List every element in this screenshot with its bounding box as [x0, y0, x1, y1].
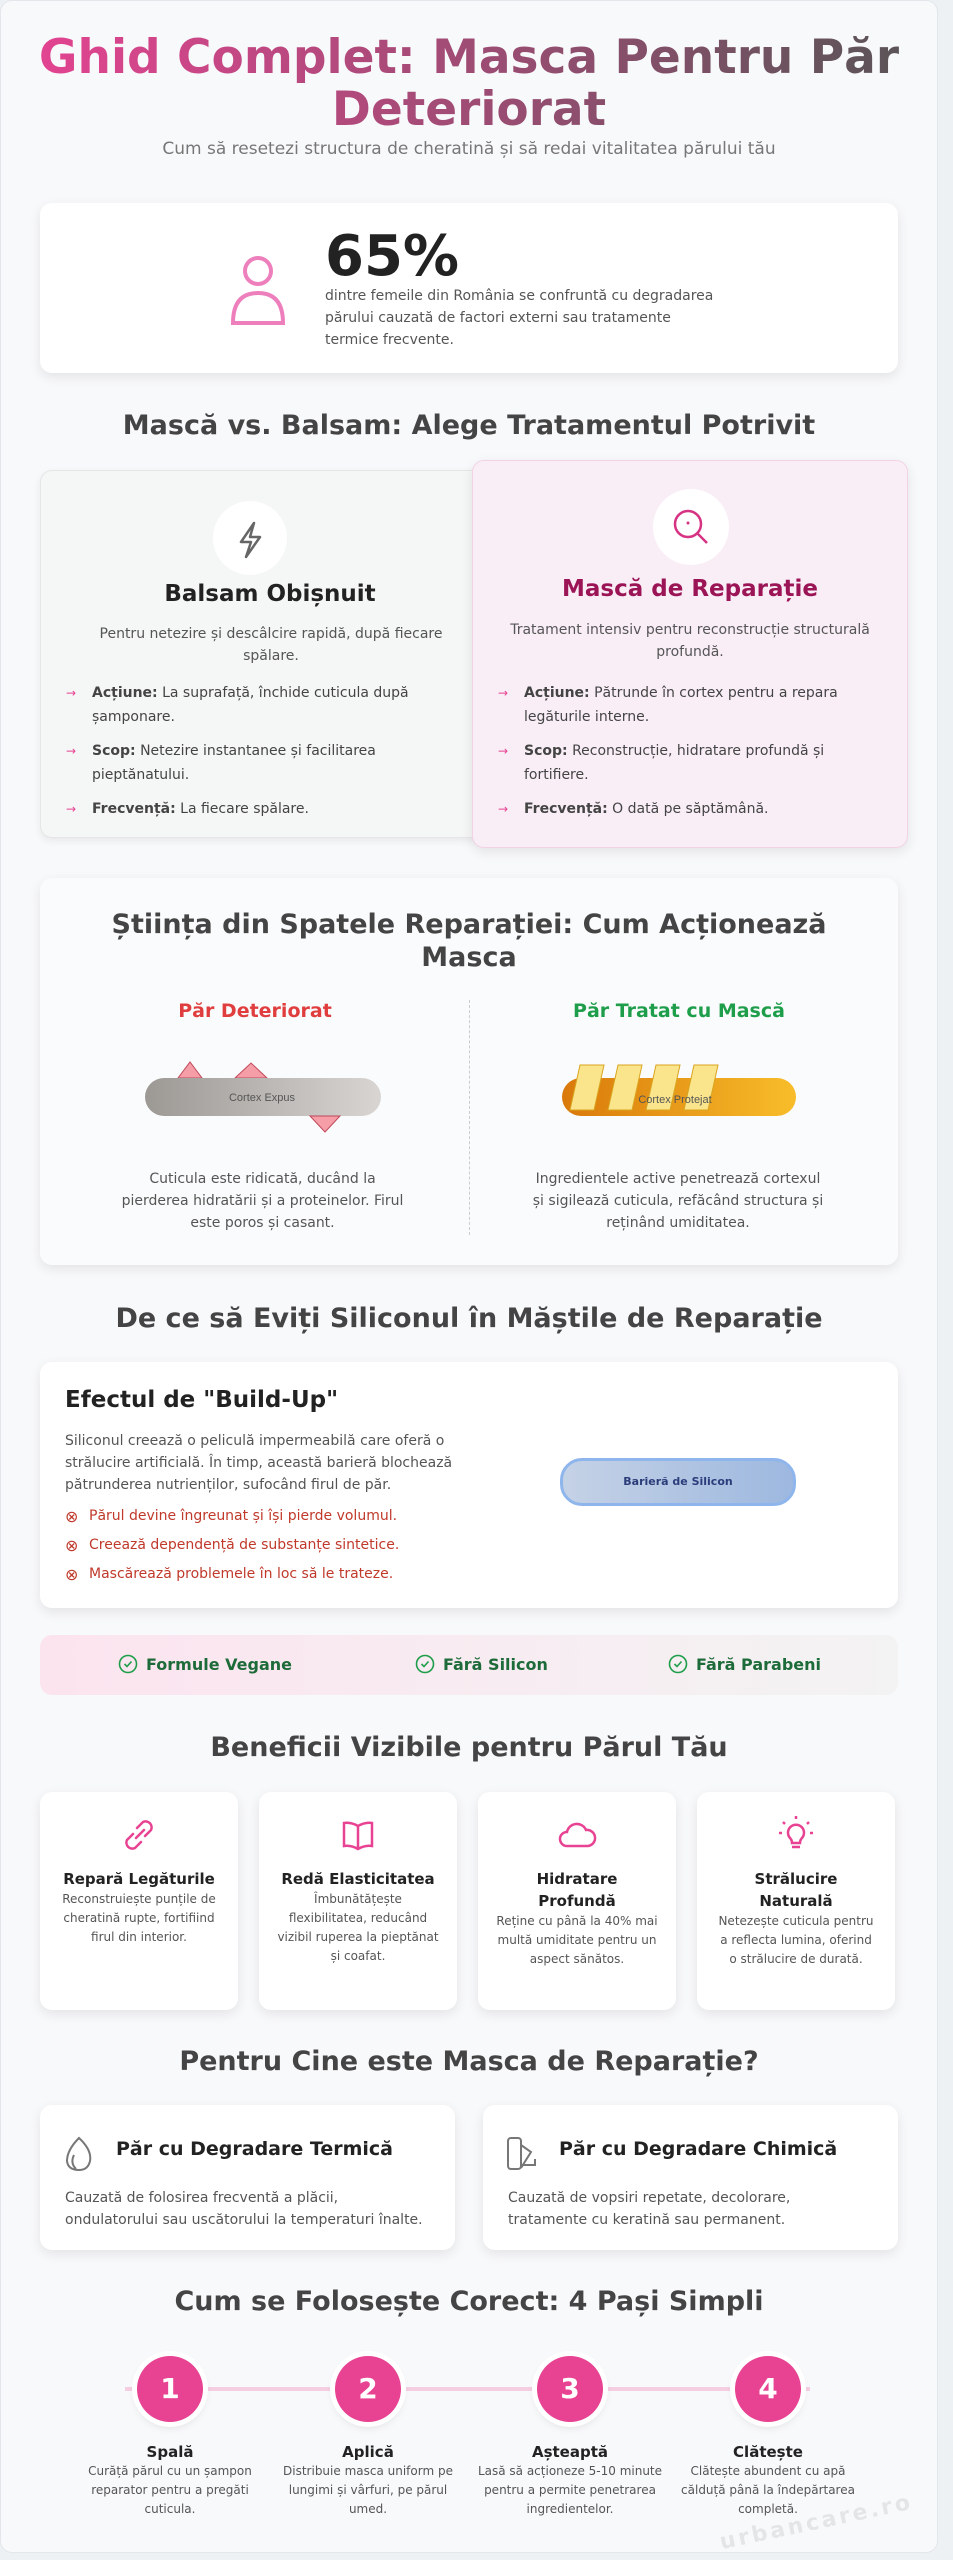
badges strip	[40, 1635, 898, 1695]
right: treated: Păr Tratat cu Mască	[573, 1000, 785, 1022]
title: Deteriorat	[332, 82, 606, 137]
benefit: elasticitate: Redă Elasticitatea	[281, 1870, 435, 1888]
list: drawbacks: Mascărează problemele în loc să le trateze.	[89, 1566, 393, 1582]
heading: comparison: Mască vs. Balsam: Alege Tratamentul Potrivit	[123, 410, 815, 441]
panel: masca	[472, 460, 908, 848]
heading: steps: Cum se Folosește Corect: 4 Pași Simpli	[174, 2286, 764, 2317]
steps timeline	[88, 2356, 855, 2516]
panel: balsam: Pentru netezire și descâlcire rapidă, după fiecare spălare.	[100, 626, 442, 664]
benefit: elasticitate: Îmbunătățește flexibilitatea, reducând vizibil ruperea la pieptănat și coafat.	[277, 1892, 439, 1963]
panel: balsam	[40, 470, 500, 838]
title: Ghid Complet: Masca Pentru Păr	[39, 30, 899, 85]
step 4	[681, 2356, 855, 2516]
diagram: silicone barrier	[560, 1458, 796, 1506]
step 4: Clătește	[733, 2443, 803, 2461]
panel: balsam: Acțiune: La suprafață, închide cuticula după șamponare.	[92, 685, 409, 725]
panel: masca: Acțiune: Pătrunde în cortex pentru a repara legăturile interne.	[524, 685, 838, 725]
step 2: Distribuie masca uniform pe lungimi și vârfuri, pe părul umed.	[283, 2464, 453, 2516]
benefit: legaturi: Reconstruiește punțile de cheratină rupte, fortifiind firul din interior.	[62, 1892, 216, 1944]
panel: science: Ingredientele active penetrează cortexul și sigilează cuticula, refăcând structura și reținând umiditatea.	[533, 1171, 823, 1231]
panel: masca: Frecvență: O dată pe săptămână.	[524, 801, 769, 817]
step 4: Clătește abundent cu apă călduță până la îndepărtarea completă.	[681, 2464, 855, 2516]
diagram: treated hair: Cortex Protejat	[638, 1094, 712, 1106]
panel: balsam: Scop: Netezire instantanee și facilitarea pieptănatului.	[92, 743, 376, 783]
diagram: silicone barrier: Barieră de Silicon	[623, 1475, 733, 1488]
step 3: Așteaptă	[532, 2443, 608, 2461]
left: damaged: Păr Deteriorat	[178, 1000, 332, 1022]
benefit: hidratare: Profundă	[538, 1892, 616, 1910]
title	[0, 32, 938, 136]
step 2	[283, 2356, 453, 2516]
step 1: 1	[160, 2372, 180, 2405]
badge: parabeni: Fără Parabeni	[696, 1655, 821, 1674]
card: chemical: Păr cu Degradare Chimică	[559, 2138, 837, 2160]
step 2: 2	[358, 2372, 378, 2405]
benefit: legaturi	[40, 1792, 238, 2010]
panel: masca: Tratament intensiv pentru reconstrucție structurală profundă.	[510, 622, 870, 660]
stat number: 65%	[325, 224, 459, 289]
step 1	[88, 2356, 252, 2516]
benefit: hidratare: Hidratare	[537, 1870, 617, 1888]
panel: build-up: Efectul de "Build-Up"	[65, 1387, 338, 1413]
card: chemical: Cauzată de vopsiri repetate, decolorare, tratamente cu keratină sau permanent.	[508, 2190, 790, 2228]
benefit: stralucire	[697, 1792, 895, 2010]
panel: balsam: Frecvență: La fiecare spălare.	[92, 801, 309, 817]
benefit: stralucire: Strălucire	[755, 1870, 837, 1888]
panel: build-up	[40, 1362, 898, 1608]
card: thermal	[40, 2105, 455, 2250]
step 3: 3	[560, 2372, 580, 2405]
stat text: dintre femeile din România se confruntă cu degradarea părului cauzată de factori externi sau tratamente termice frecvente.	[325, 288, 713, 348]
step 2: Aplică	[342, 2443, 394, 2461]
step 3: Lasă să acționeze 5-10 minute pentru a permite penetrarea ingredientelor.	[478, 2464, 662, 2516]
step 4: 4	[758, 2372, 778, 2405]
panel: masca: Scop: Reconstrucție, hidratare profundă și fortifiere.	[524, 743, 824, 783]
panel: masca: Mască de Reparație	[562, 576, 818, 602]
heading: silicone: De ce să Eviți Siliconul în Măștile de Reparație	[115, 1303, 823, 1334]
diagram: damaged hair	[145, 1061, 381, 1133]
benefit: stralucire: Netezește cuticula pentru a reflecta lumina, oferind o strălucire de durată.	[718, 1914, 874, 1966]
icon: search	[653, 489, 729, 565]
list: drawbacks	[66, 1508, 399, 1582]
panel: science	[40, 878, 898, 1265]
panel: science: Cuticula este ridicată, ducând la pierderea hidratării și a proteinelor. Firul este poros și casant.	[122, 1171, 403, 1231]
icon: flame	[66, 2136, 92, 2171]
benefit: hidratare	[478, 1792, 676, 2010]
badge: silicon: Fără Silicon	[443, 1655, 548, 1674]
badge: vegan: Formule Vegane	[146, 1655, 292, 1674]
subtitle: Cum să resetezi structura de cheratină și să redai vitalitatea părului tău	[162, 139, 776, 159]
list: drawbacks: Creează dependență de substanțe sintetice.	[89, 1537, 399, 1553]
step 1: Curăță părul cu un șampon reparator pentru a pregăti cuticula.	[88, 2464, 252, 2516]
icon: swatch	[507, 2137, 536, 2170]
heading: science: Știința din Spatele Reparației: Cum Acționează Masca	[112, 909, 826, 973]
diagram: treated hair	[562, 1064, 796, 1116]
panel: build-up: Siliconul creează o peliculă impermeabilă care oferă o strălucire artificială. În timp, această barieră blochează pătrunderea nutrienților, sufocând firul de păr.	[65, 1433, 452, 1493]
diagram: damaged hair: Cortex Expus	[229, 1092, 296, 1104]
list: drawbacks: Părul devine îngreunat și își pierde volumul.	[89, 1508, 397, 1524]
icon: person	[231, 256, 285, 325]
benefit: legaturi: Repară Legăturile	[63, 1870, 215, 1888]
heading: benefits: Beneficii Vizibile pentru Părul Tău	[210, 1732, 728, 1763]
icon: bolt	[213, 501, 287, 575]
heading: for whom: Pentru Cine este Masca de Reparație?	[179, 2046, 759, 2077]
card: thermal: Cauzată de folosirea frecventă a plăcii, ondulatorului sau uscătorului la temperaturi înalte.	[65, 2190, 423, 2228]
stat card	[40, 203, 898, 373]
step 3	[478, 2356, 662, 2516]
step 1: Spală	[147, 2443, 193, 2461]
watermark: urbancare.ro	[718, 2490, 915, 2555]
benefit: hidratare: Reține cu până la 40% mai multă umiditate pentru un aspect sănătos.	[496, 1914, 658, 1966]
panel: balsam: Balsam Obișnuit	[164, 581, 376, 607]
card: thermal: Păr cu Degradare Termică	[116, 2138, 393, 2160]
card: chemical	[483, 2105, 898, 2250]
benefit: elasticitate	[259, 1792, 457, 2010]
benefit: stralucire: Naturală	[759, 1892, 833, 1910]
